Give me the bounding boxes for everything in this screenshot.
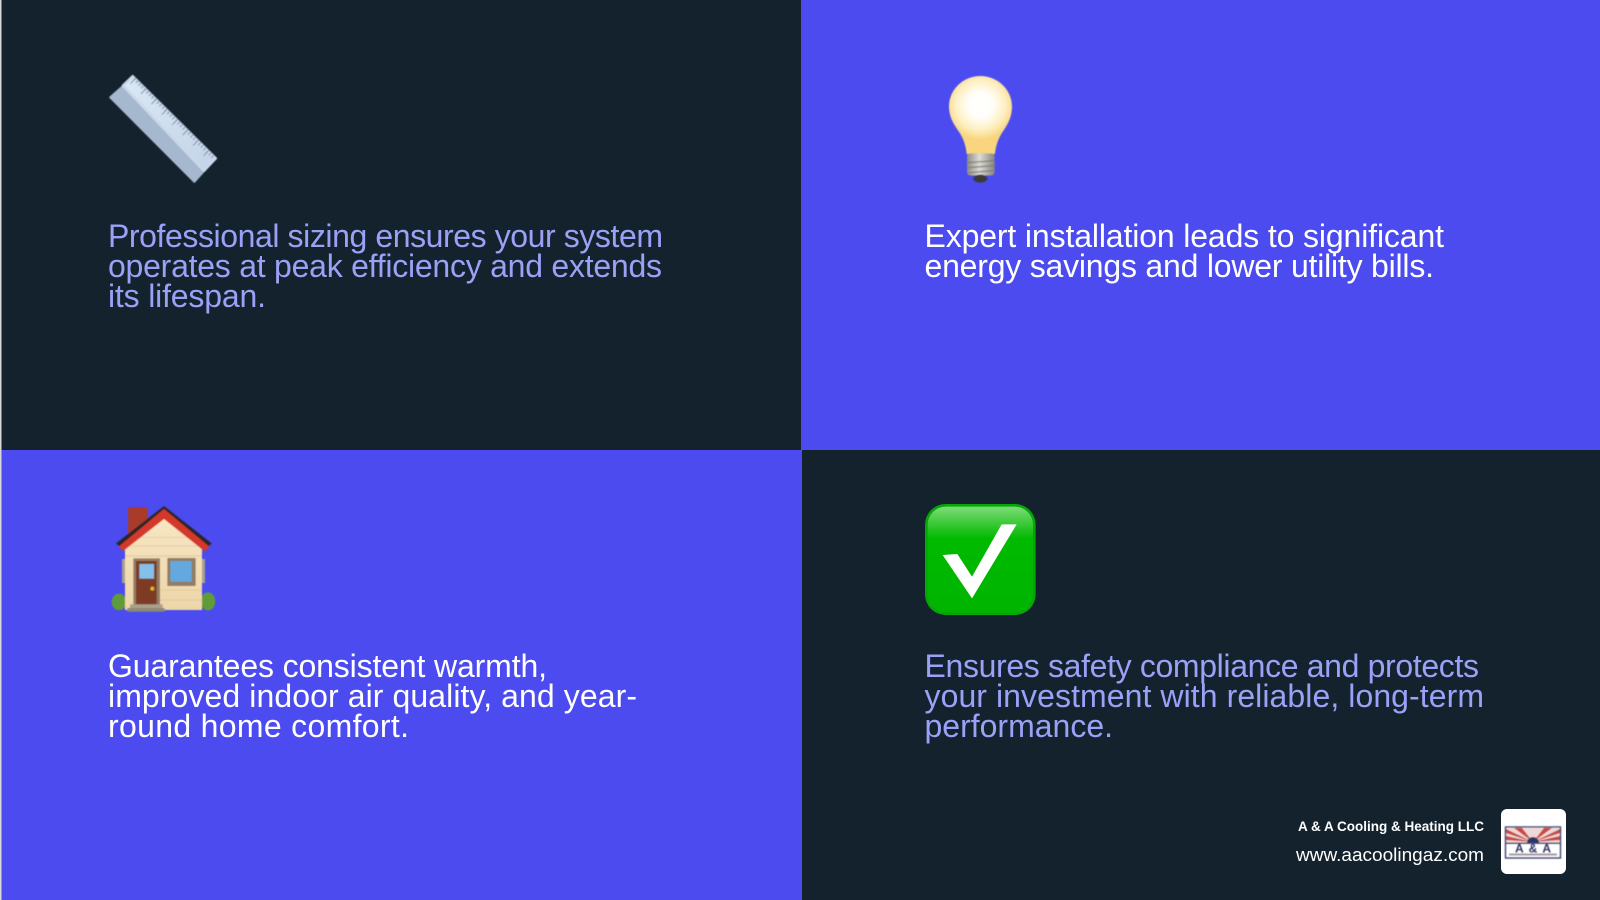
website: www.aacoolingaz.com [1295,845,1484,865]
footer: company branding [1295,809,1566,874]
text: home comfort [108,648,637,744]
icon: house [112,506,215,612]
icon: green check mark [925,504,1036,615]
logo [1501,809,1566,874]
text: professional sizing: Professional sizing ensures your system [108,218,663,254]
text: safety compliance [924,648,1484,744]
text: energy savings: Expert installation leads to significant [924,218,1444,254]
text: home comfort: Guarantees consistent warmth, [108,648,547,684]
text: home comfort: round home comfort. [108,708,409,744]
logo: A&A [1515,842,1551,856]
text: professional sizing [108,218,663,314]
panel: home comfort [0,450,802,900]
text: energy savings [924,218,1444,284]
text: safety compliance: Ensures safety compliance and protects [924,648,1479,684]
text: professional sizing: operates at peak efficiency and extends [108,248,662,284]
text: safety compliance: your investment with reliable, long-term [924,678,1484,714]
left edge strip [0,0,2,900]
panel: safety compliance [802,450,1600,900]
panel: energy savings [801,0,1600,450]
text: safety compliance: performance. [924,708,1113,744]
text: home comfort: improved indoor air quality, and year- [108,678,637,714]
icon: light bulb [949,76,1012,183]
company name: A & A Cooling & Heating LLC [1298,818,1484,834]
panel: professional sizing [0,0,801,450]
icon: ruler [111,76,216,181]
text: energy savings: energy savings and lower utility bills. [924,248,1434,284]
text: professional sizing: its lifespan. [108,278,266,314]
